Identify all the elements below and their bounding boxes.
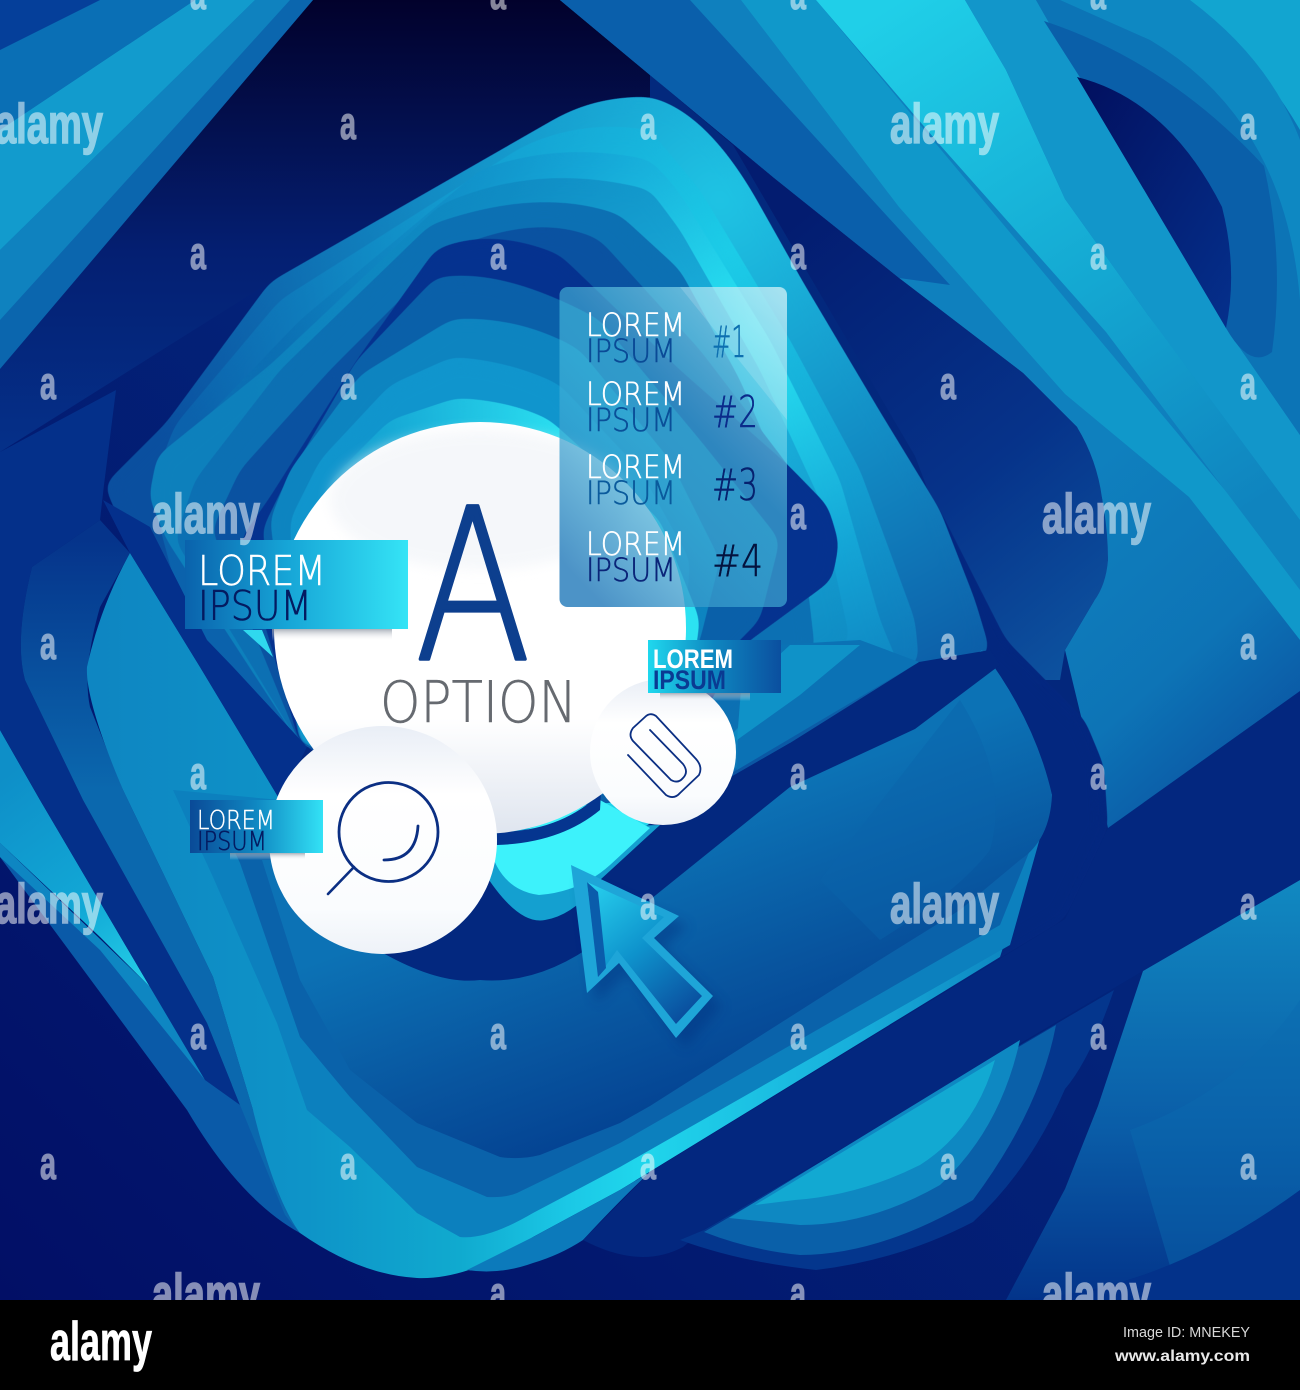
list row 1 bbox=[586, 306, 746, 370]
list row 4: LOREM bbox=[586, 525, 685, 563]
watermark: a bbox=[490, 1007, 506, 1059]
panel: ranked list bbox=[560, 287, 787, 607]
watermark: a bbox=[1240, 617, 1256, 669]
watermark: a bbox=[940, 357, 956, 409]
list row 3: LOREM bbox=[586, 448, 685, 486]
watermark: a bbox=[640, 97, 656, 149]
image id: Image ID: MNEKEY bbox=[1123, 1324, 1250, 1341]
label: large: IPSUM bbox=[198, 582, 312, 630]
list row 2 bbox=[586, 375, 758, 439]
label: paperclip: LOREM bbox=[653, 644, 733, 674]
watermark: a bbox=[40, 357, 56, 409]
label: large: LOREM bbox=[198, 547, 326, 595]
list row 1: LOREM bbox=[586, 306, 685, 344]
list row 2: LOREM bbox=[586, 375, 685, 413]
list row 2: #2 bbox=[712, 387, 758, 438]
list row 4: #4 bbox=[712, 536, 763, 587]
list row 3: #3 bbox=[712, 460, 758, 511]
watermark: a bbox=[790, 747, 806, 799]
watermark: a bbox=[790, 227, 806, 279]
dark diagonal band and lower lens bbox=[583, 691, 1300, 1270]
central ring layers bbox=[21, 97, 1108, 1278]
watermark: a bbox=[640, 1137, 656, 1189]
watermark: a bbox=[940, 617, 956, 669]
watermark: a bbox=[640, 877, 656, 929]
list row 4: IPSUM bbox=[586, 551, 676, 589]
footer bar bbox=[0, 1300, 1300, 1390]
watermark: a bbox=[340, 357, 356, 409]
watermark: a bbox=[190, 227, 206, 279]
watermark: alamy bbox=[152, 1262, 260, 1325]
label: search bbox=[190, 800, 323, 860]
icon: paperclip bbox=[628, 714, 700, 797]
website: www.alamy.com bbox=[1114, 1348, 1250, 1365]
letter A: A bbox=[415, 464, 531, 709]
label: search: LOREM bbox=[197, 806, 275, 836]
watermark: a bbox=[790, 1267, 806, 1319]
watermark: a bbox=[1240, 97, 1256, 149]
icon: magnifying glass bbox=[328, 782, 438, 894]
main white circle bbox=[274, 422, 686, 834]
watermark: a bbox=[340, 1137, 356, 1189]
label: paperclip: IPSUM bbox=[653, 665, 726, 695]
label: search: IPSUM bbox=[197, 827, 267, 857]
arrow: cursor bbox=[571, 865, 722, 1048]
watermark: alamy bbox=[1042, 482, 1151, 545]
watermark: alamy bbox=[1042, 1262, 1151, 1325]
watermark: a bbox=[1090, 1007, 1106, 1059]
watermark: a bbox=[40, 1137, 56, 1189]
watermark: a bbox=[1240, 357, 1256, 409]
option label: OPTION bbox=[380, 670, 577, 736]
paperclip circle bbox=[590, 679, 736, 825]
watermark: a bbox=[190, 747, 206, 799]
list row 4 bbox=[586, 525, 763, 589]
lower-left stripes bbox=[0, 390, 330, 1240]
watermark: alamy bbox=[890, 92, 999, 155]
label: paperclip bbox=[648, 640, 781, 701]
list row 1: #1 bbox=[712, 317, 746, 368]
watermark: alamy bbox=[890, 872, 999, 935]
watermark: a bbox=[790, 487, 806, 539]
watermark: a bbox=[490, 1267, 506, 1319]
watermark: a bbox=[790, 1007, 806, 1059]
watermark: a bbox=[1090, 747, 1106, 799]
list row 1: IPSUM bbox=[586, 332, 676, 370]
list row 3: IPSUM bbox=[586, 474, 676, 512]
footer logo: alamy bbox=[50, 1310, 152, 1372]
watermark: a bbox=[490, 227, 506, 279]
list row 2: IPSUM bbox=[586, 401, 676, 439]
watermark: a bbox=[940, 1137, 956, 1189]
list row 3 bbox=[586, 448, 758, 512]
watermark: alamy bbox=[152, 482, 260, 545]
search circle bbox=[269, 726, 497, 954]
watermark: a bbox=[340, 97, 356, 149]
watermark: a bbox=[1240, 1137, 1256, 1189]
watermark: a bbox=[1240, 877, 1256, 929]
watermark: a bbox=[1090, 227, 1106, 279]
watermark: a bbox=[190, 1007, 206, 1059]
watermark: a bbox=[40, 617, 56, 669]
label: large bbox=[185, 540, 408, 641]
